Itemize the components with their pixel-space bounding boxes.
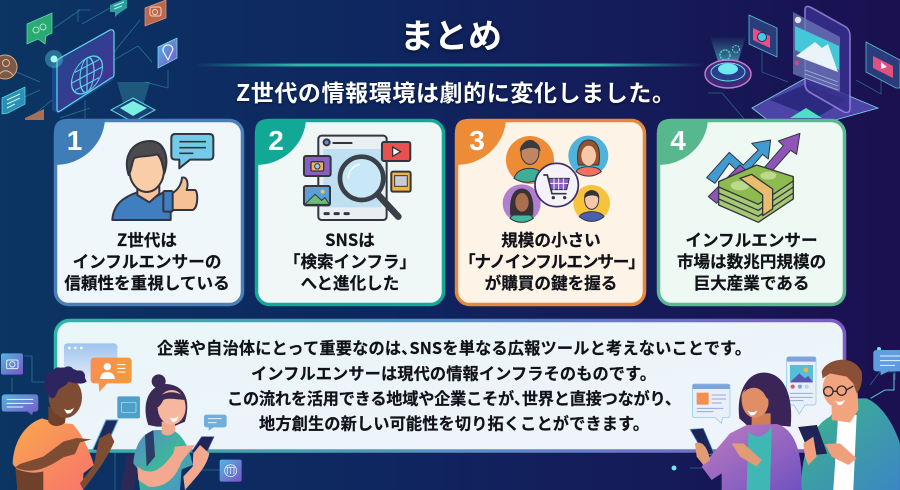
person blue — [568, 136, 608, 176]
number badge 3 — [455, 119, 506, 165]
card 2 text: SNSは — [325, 227, 375, 251]
card 3 text: 「ナノインフルエンサー」 — [459, 248, 645, 272]
panel: bottom summary — [56, 320, 844, 451]
card 3 text: 規模の小さい — [501, 227, 601, 251]
icon: image tile — [117, 396, 140, 418]
card 4 text: 市場は数兆円規模の — [677, 248, 826, 272]
card 2 text: 「検索インフラ」 — [284, 248, 416, 272]
number badge 3: 3 — [469, 125, 485, 156]
icon: right bubble — [873, 350, 900, 375]
number badge 2 — [255, 119, 306, 165]
number badge 4: 4 — [670, 125, 686, 156]
number badge 1: 1 — [67, 125, 82, 156]
card 1 text — [64, 227, 230, 294]
summary text: 地方創生の新しい可能性を切り拓くことができます。 — [259, 410, 649, 434]
icon: orange card — [25, 109, 44, 120]
number badge 4 — [657, 119, 708, 165]
icon: profile bubble — [91, 358, 132, 392]
bill stack — [719, 165, 793, 222]
summary text — [157, 335, 751, 434]
person: man in green hoodie — [799, 360, 900, 490]
icon: green chat bubble — [27, 13, 52, 44]
person: man in orange — [13, 366, 118, 490]
video card — [866, 42, 900, 88]
illustration: right people — [690, 350, 900, 490]
card 2 text — [284, 227, 416, 294]
icon: map pin card — [158, 38, 177, 68]
person purple — [503, 184, 541, 222]
card 1 text: 信頼性を重視している — [64, 270, 230, 294]
illustration: network globe top left — [0, 0, 177, 122]
phone — [793, 6, 850, 112]
icon: teal bubble — [110, 0, 127, 17]
illustration: devices top right — [705, 6, 900, 122]
icon: shopping cart — [535, 163, 578, 207]
number badge 1 — [54, 119, 105, 165]
hologram disc — [705, 36, 751, 88]
person yellow — [573, 185, 610, 222]
icon: left message bubble — [2, 394, 38, 415]
icon: small bubble — [204, 415, 227, 431]
person: woman with bun — [121, 374, 214, 490]
number badge 2: 2 — [268, 125, 284, 156]
panel: card 4 — [657, 119, 844, 304]
hologram pedestal left — [111, 82, 155, 122]
card 1 text: インフルエンサーの — [73, 248, 221, 272]
illustration: left people — [1, 343, 242, 490]
summary text: インフルエンサーは現代の情報インフラそのものです。 — [251, 360, 656, 384]
panel: card 3 — [455, 119, 645, 304]
icon: person circle — [0, 55, 17, 79]
icon: person thumbs up — [112, 134, 213, 220]
card 3 text: が購買の鍵を握る — [485, 270, 617, 294]
icon: camera card — [145, 0, 166, 26]
card 2 text: へと進化した — [301, 270, 399, 294]
subtitle: Z世代の情報環境は劇的に変化しました。 — [236, 74, 675, 108]
summary text: この流れを活用できる地域や企業こそが、世界と直接つながり、 — [227, 386, 681, 410]
title: まとめ — [400, 9, 502, 58]
card 4 text — [677, 227, 826, 294]
icon: globe — [72, 50, 102, 100]
icon: search window — [304, 136, 411, 220]
icon: shop tile — [220, 460, 242, 482]
icon: article card — [692, 384, 730, 423]
panel: card 1 — [54, 119, 242, 304]
summary text: 企業や自治体にとって重要なのは、SNSを単なる広報ツールと考えないことです。 — [157, 335, 751, 359]
panel: card 2 — [255, 119, 444, 304]
card 1 text: Z世代は — [117, 227, 177, 251]
card 4 text: 巨大産業である — [694, 270, 810, 294]
network lines bottom — [12, 356, 895, 490]
icon: camera tile — [1, 353, 23, 375]
icon: people and cart — [503, 136, 610, 222]
person orange — [506, 136, 554, 184]
icon: money and arrows — [707, 133, 800, 222]
icon: speech bubble — [171, 134, 213, 168]
icon: photo card — [787, 357, 816, 414]
icon: browser window — [64, 343, 117, 383]
card 4 text: インフルエンサー — [685, 227, 818, 251]
card 3 text — [459, 227, 645, 294]
title rule — [195, 64, 705, 66]
person: woman in purple — [690, 373, 802, 490]
camera card — [749, 15, 777, 57]
laptop base — [752, 78, 878, 122]
globe panel — [45, 30, 114, 114]
dot nodes — [672, 347, 881, 470]
icon: blue message card — [2, 87, 25, 114]
